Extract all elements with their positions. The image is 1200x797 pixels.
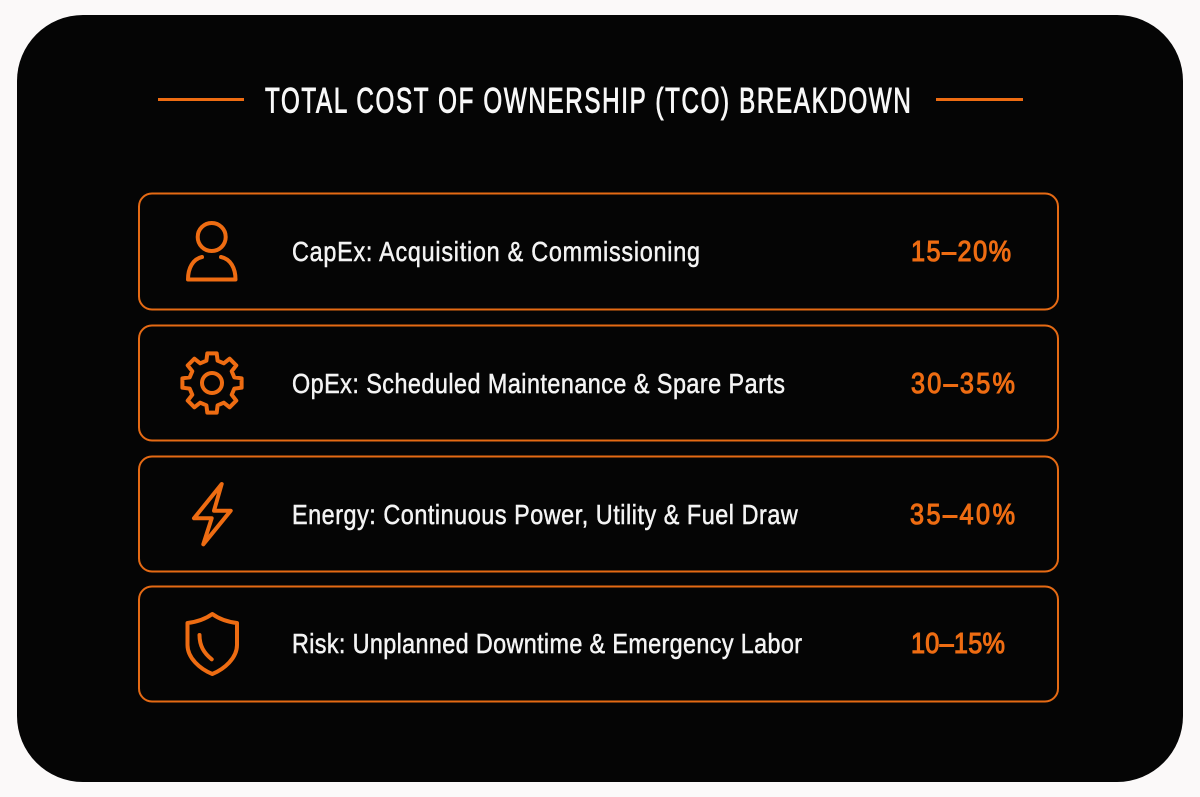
- value: Energy share: 35–40%: [910, 497, 1015, 530]
- label: CapEx: CapEx: Acquisition & Commissioning: [292, 237, 700, 267]
- value: Risk share: 10–15%: [911, 626, 1005, 659]
- icon: shield: [188, 614, 237, 674]
- label: Energy: Energy: Continuous Power, Utility & Fuel Draw: [292, 500, 798, 530]
- value: CapEx share: 15–20%: [911, 234, 1011, 267]
- title text: TOTAL COST OF OWNERSHIP (TCO) BREAKDOWN: [265, 82, 911, 121]
- panel: Risk row: [139, 586, 1058, 702]
- icon: gear: [182, 353, 242, 413]
- label: Risk: Risk: Unplanned Downtime & Emergency Labor: [292, 629, 802, 659]
- panel: OpEx row: [139, 326, 1058, 440]
- value: OpEx share: 30–35%: [911, 366, 1015, 399]
- panel: Energy row: [139, 456, 1058, 572]
- icon: lightning bolt: [194, 484, 231, 544]
- panel: CapEx row: [139, 194, 1058, 310]
- label: OpEx: OpEx: Scheduled Maintenance & Spare Parts: [292, 369, 785, 399]
- icon: person: [188, 223, 236, 280]
